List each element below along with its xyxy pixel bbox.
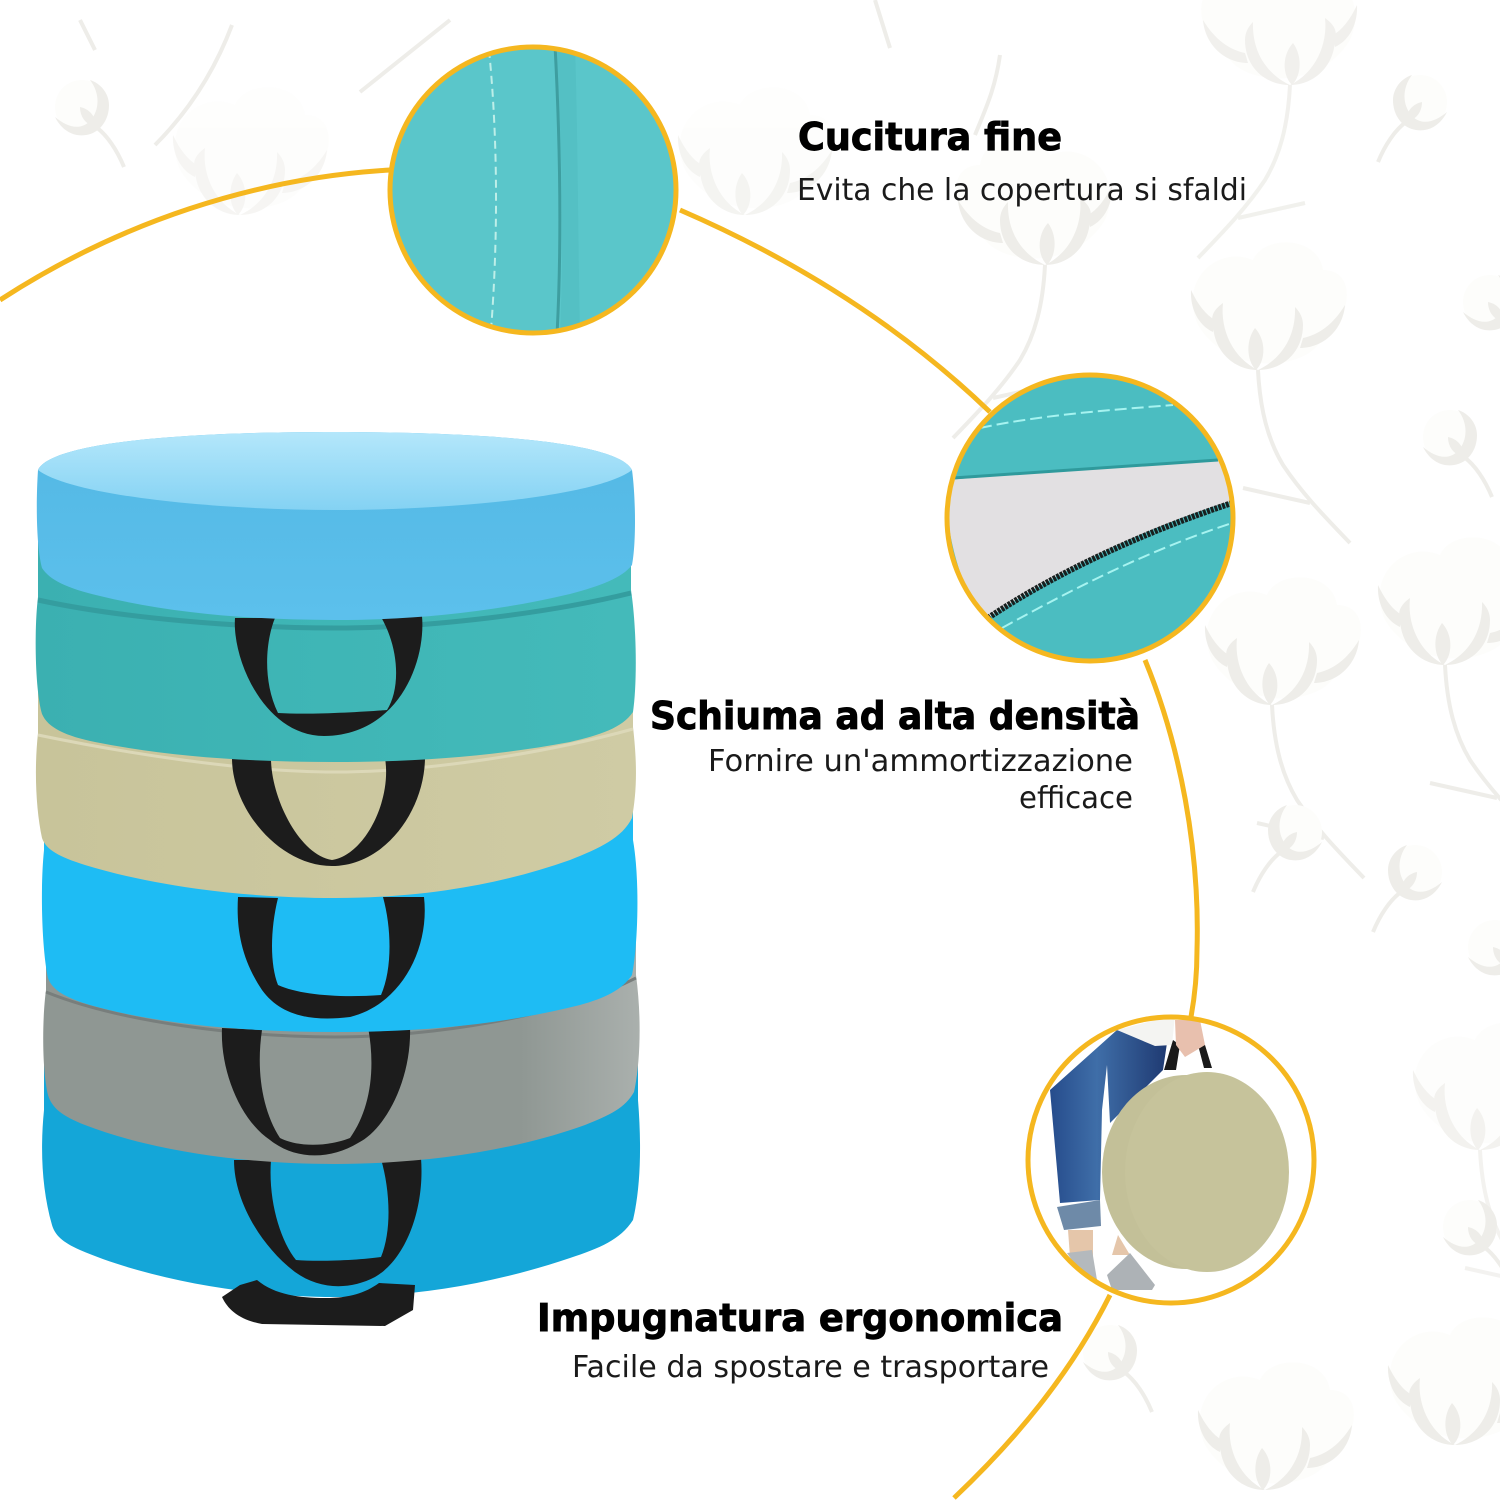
handle 2 [235,616,422,736]
feature: high density foam [650,694,1140,816]
feature: ergonomic handle: Impugnatura ergonomica [537,1296,1063,1340]
feature: fine stitching [797,115,1247,208]
feature: fine stitching: Cucitura fine [798,115,1062,159]
cushion 2: teal [36,540,636,762]
handle 5 [222,1026,410,1155]
feature: high density foam: Fornire un'ammortizzazione [708,744,1133,779]
feature: high density foam: Schiuma ad alta densità [650,694,1140,738]
detail circle: carrying handle [1028,1015,1314,1303]
cushion 1: light blue [37,432,635,620]
handle 3 [232,757,425,866]
cushion stack [36,432,640,1326]
handle 6 [234,1158,422,1286]
detail circle: fine stitching [380,40,690,340]
yellow connecting arc [0,170,1197,1498]
cushion 3: beige [36,660,636,898]
feature: fine stitching: Evita che la copertura si sfaldi [797,173,1247,208]
feature: high density foam: efficace [1019,781,1133,816]
feature: ergonomic handle [537,1296,1063,1385]
cushion 6: blue [42,1040,640,1297]
bottom handle [222,1280,415,1326]
cushion 5: grey [43,920,640,1164]
detail circle: foam and zipper [940,370,1240,670]
feature: ergonomic handle: Facile da spostare e trasportare [572,1350,1049,1385]
handle 4 [238,897,425,1019]
cushion 4: blue [42,790,637,1032]
